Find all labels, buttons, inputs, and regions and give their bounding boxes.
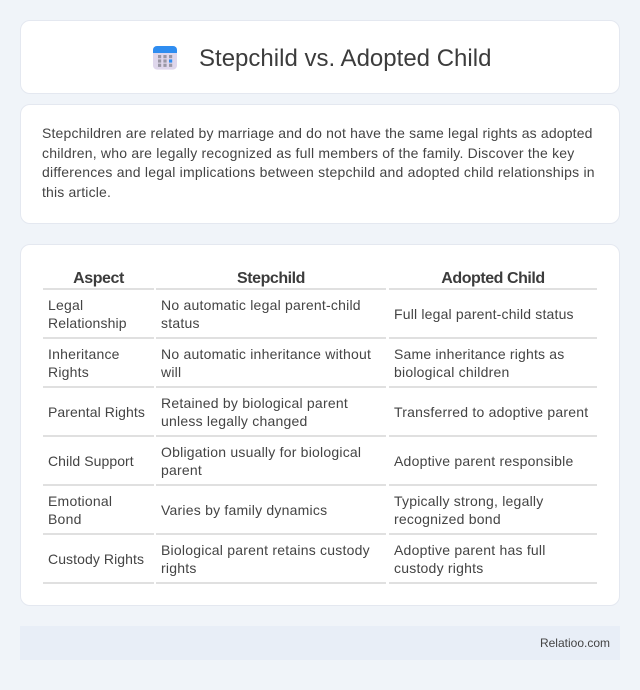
table header: Stepchild: Stepchild: [237, 270, 305, 287]
row: Child Support: [48, 444, 574, 478]
text block: introduction: children, who are legally recognized as full members of the family. Discover the key: [42, 145, 574, 161]
text block: introduction: differences and legal implications between stepchild and adopted child relationships in: [42, 164, 595, 180]
row: Legal Relationship: Legal: [48, 297, 83, 313]
row: Inheritance Rights: Same inheritance rights as: [394, 346, 564, 362]
row: Parental Rights: unless legally changed: [161, 413, 308, 429]
row: Parental Rights: Retained by biological parent: [161, 395, 348, 411]
row: Inheritance Rights: biological children: [394, 364, 509, 380]
table: comparison: [43, 288, 597, 584]
row: Parental Rights: Transferred to adoptive parent: [394, 404, 588, 420]
row: Legal Relationship: Full legal parent-child status: [394, 306, 574, 322]
row: Legal Relationship: [48, 297, 574, 331]
row: Child Support: Obligation usually for biological: [161, 444, 361, 460]
row: Emotional Bond: Typically strong, legally: [394, 493, 543, 509]
row: Custody Rights: rights: [161, 560, 197, 576]
row: Custody Rights: Biological parent retains custody: [161, 542, 370, 558]
row: Child Support: Child Support: [48, 453, 134, 469]
panel: introduction: [20, 104, 620, 224]
row: Legal Relationship: Relationship: [48, 315, 127, 331]
row: Custody Rights: Adoptive parent has full: [394, 542, 546, 558]
row: Emotional Bond: recognized bond: [394, 511, 501, 527]
row: Inheritance Rights: Inheritance: [48, 346, 120, 362]
row: Custody Rights: Custody Rights: [48, 551, 144, 567]
row: Parental Rights: [48, 395, 588, 429]
panel: title card: [20, 20, 620, 94]
title: Stepchild vs. Adopted Child: [199, 45, 491, 72]
row: Emotional Bond: Emotional: [48, 493, 112, 509]
row: Custody Rights: custody rights: [394, 560, 483, 576]
row: Inheritance Rights: will: [161, 364, 181, 380]
row: Inheritance Rights: No automatic inheritance without: [161, 346, 371, 362]
row: Emotional Bond: Varies by family dynamics: [161, 502, 327, 518]
row: Inheritance Rights: [48, 346, 564, 380]
text block: introduction: [42, 125, 595, 200]
row: Parental Rights: Parental Rights: [48, 404, 145, 420]
row: Custody Rights: [48, 542, 546, 576]
row: Inheritance Rights: Rights: [48, 364, 89, 380]
table header: Adopted Child: Adopted Child: [441, 270, 545, 287]
row: Child Support: Adoptive parent responsible: [394, 453, 574, 469]
row: Legal Relationship: status: [161, 315, 200, 331]
row: Emotional Bond: Bond: [48, 511, 82, 527]
row: Child Support: parent: [161, 462, 202, 478]
icon: calendar: [153, 46, 177, 70]
row: Emotional Bond: [48, 493, 544, 527]
panel: comparison table: [20, 244, 620, 606]
footer text: Relatioo.com: [540, 636, 610, 650]
text block: introduction: this article.: [42, 184, 111, 200]
footer bar: [20, 626, 620, 660]
text block: introduction: Stepchildren are related by marriage and do not have the same legal rights as adopted: [42, 125, 593, 141]
table header: Aspect: Aspect: [73, 270, 124, 287]
row: Legal Relationship: No automatic legal parent-child: [161, 297, 361, 313]
